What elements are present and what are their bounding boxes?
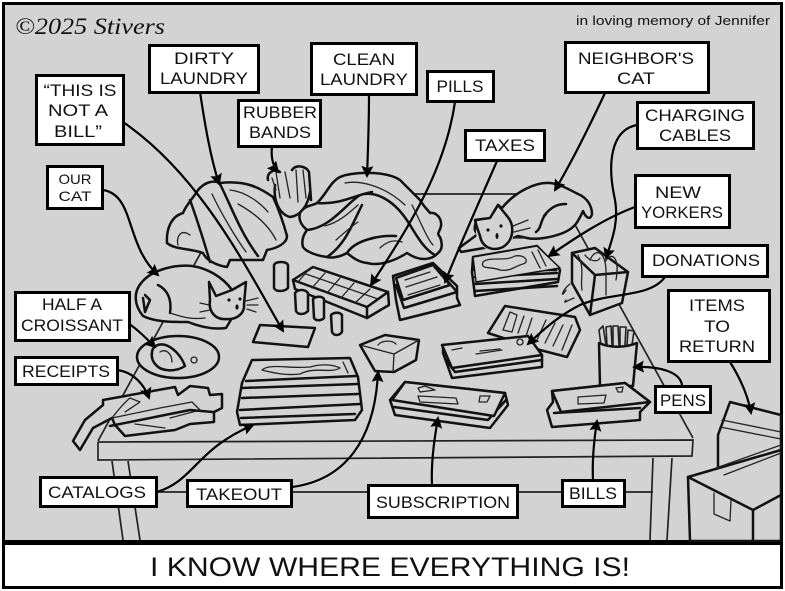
- label: dirty laundry: DIRTY: [174, 49, 234, 68]
- label: catalogs: CATALOGS: [48, 483, 146, 502]
- label: this is not a bill: “THIS IS: [44, 81, 116, 100]
- arrow: neighbor's cat: [555, 93, 605, 190]
- label: charging cables: CABLES: [659, 126, 731, 145]
- label: pens: [656, 386, 710, 412]
- arrow: pens: [634, 367, 682, 385]
- caption bar: I KNOW WHERE EVERYTHING IS!: [150, 552, 630, 582]
- label: our cat: OUR: [58, 171, 92, 187]
- label: this is not a bill: NOT A: [48, 101, 109, 120]
- label: takeout: [188, 480, 292, 506]
- label: neighbor's cat: NEIGHBOR'S: [578, 49, 694, 68]
- taxes stack: [393, 263, 460, 320]
- donations envelopes: [442, 306, 580, 378]
- moving boxes: items to return: [688, 402, 781, 541]
- label: new yorkers: YORKERS: [641, 203, 723, 222]
- signature: ©2025 Stivers: [15, 14, 165, 39]
- label: catalogs: [40, 478, 156, 506]
- neighbor's cat: [459, 183, 592, 252]
- arrow: taxes: [445, 161, 497, 282]
- label: items to return: ITEMS: [689, 296, 745, 315]
- label: items to return: RETURN: [679, 337, 755, 356]
- dirty laundry pile: [167, 182, 287, 267]
- half a croissant on plate: [137, 336, 219, 378]
- arrow: items to return: [730, 362, 751, 413]
- arrow: takeout: [292, 372, 378, 487]
- receipts: [73, 386, 222, 450]
- label: our cat: [48, 166, 102, 208]
- table: [98, 194, 693, 540]
- label: clean laundry: LAUNDRY: [320, 70, 408, 89]
- label: taxes: TAXES: [475, 136, 535, 155]
- label: charging cables: [638, 102, 754, 148]
- label: half a croissant: CROISSANT: [21, 316, 123, 335]
- arrow: bills: [593, 421, 597, 480]
- label: items to return: [668, 290, 770, 362]
- label: half a croissant: HALF A: [42, 295, 103, 314]
- caption bar: [4, 544, 782, 588]
- label: donations: [642, 246, 768, 276]
- label: neighbor's cat: CAT: [617, 69, 655, 88]
- arrow: pills: [371, 102, 455, 285]
- new yorkers stack: [472, 246, 560, 296]
- arrow: our cat: [103, 190, 158, 275]
- label: pills: [428, 72, 494, 102]
- arrow: charging cables: [606, 125, 637, 258]
- arrow: dirty laundry: [200, 92, 219, 184]
- label: neighbor's cat: [566, 42, 708, 92]
- label: dirty laundry: LAUNDRY: [160, 69, 248, 88]
- arrow: rubber bands: [272, 147, 278, 172]
- label: pills: PILLS: [436, 77, 484, 96]
- label: half a croissant: [16, 292, 130, 340]
- label: bills: [562, 480, 624, 506]
- charging cables in bag: [563, 248, 628, 315]
- label: pens: PENS: [660, 391, 706, 410]
- label: new yorkers: NEW: [655, 183, 701, 202]
- dedication: in loving memory of Jennifer: [576, 14, 770, 28]
- label: rubber bands: RUBBER: [243, 103, 317, 122]
- catalogs stack: [237, 358, 362, 425]
- label: this is not a bill: BILL”: [54, 122, 102, 141]
- label: new yorkers: [636, 176, 730, 228]
- arrow: clean laundry: [367, 94, 369, 176]
- arrow: this is not a bill: [123, 122, 283, 331]
- arrow: catalogs: [157, 425, 253, 492]
- subscription stack: [390, 382, 508, 428]
- arrow: receipts: [117, 370, 149, 398]
- label: takeout: TAKEOUT: [196, 485, 282, 504]
- arrow: donations: [528, 277, 665, 344]
- label: charging cables: CHARGING: [645, 106, 745, 125]
- label: dirty laundry: [150, 46, 258, 92]
- pens in cup: [599, 326, 637, 386]
- label: items to return: TO: [704, 317, 730, 336]
- label: this is not a bill: [36, 76, 124, 144]
- label: rubber bands: BANDS: [249, 123, 311, 142]
- rubber bands in cup: [268, 166, 311, 217]
- pill organizer and bottles: [274, 262, 389, 335]
- arrow: new yorkers: [549, 207, 635, 256]
- label: clean laundry: CLEAN: [333, 50, 395, 69]
- label: rubber bands: [238, 100, 320, 146]
- bills stack: [547, 383, 650, 427]
- label: clean laundry: [312, 44, 416, 94]
- label: receipts: RECEIPTS: [22, 362, 110, 381]
- label: bills: BILLS: [569, 484, 617, 503]
- our cat: [136, 266, 258, 329]
- label: subscription: SUBSCRIPTION: [376, 493, 510, 512]
- arrow: subscription: [432, 418, 438, 485]
- label: subscription: [368, 486, 518, 518]
- label: donations: DONATIONS: [652, 251, 760, 270]
- paper: this is not a bill: [253, 325, 315, 347]
- label: our cat: CAT: [58, 188, 92, 204]
- label: taxes: [466, 130, 544, 160]
- arrow: half a croissant: [128, 323, 155, 347]
- clean laundry pile: [299, 173, 442, 264]
- takeout box: [360, 335, 419, 372]
- label: receipts: [16, 358, 118, 384]
